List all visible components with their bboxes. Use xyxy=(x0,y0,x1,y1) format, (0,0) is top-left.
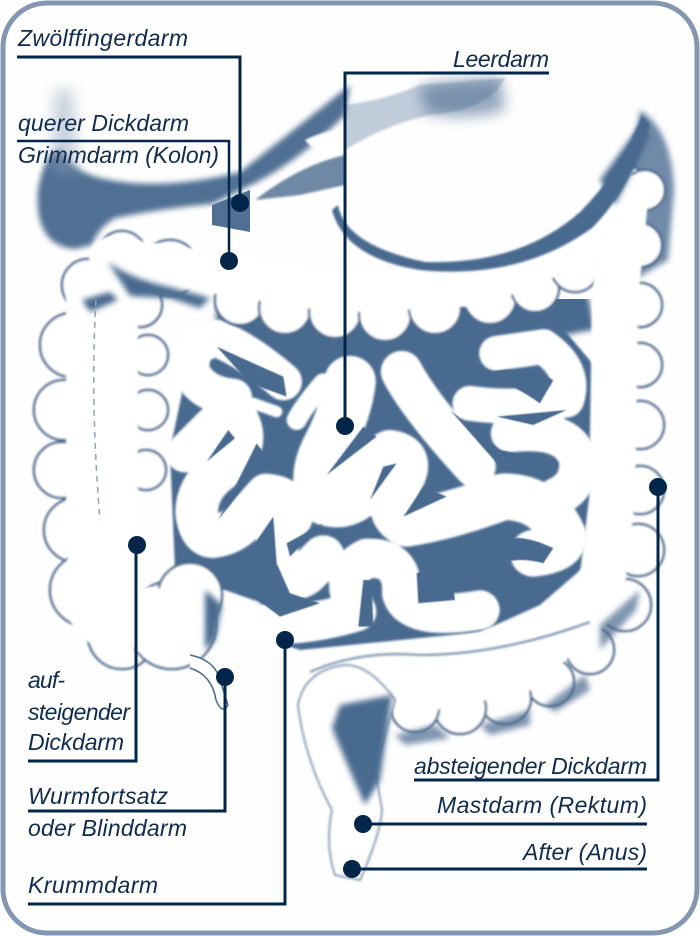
loop: hook xyxy=(363,453,563,553)
transverse colon shadow band xyxy=(215,305,590,333)
label: After (Anus): After (Anus) xyxy=(521,839,647,865)
descending colon scallops xyxy=(599,170,665,631)
label: aufsteigender Dickdarm: Dickdarm xyxy=(28,729,124,755)
stomach top shading xyxy=(420,78,505,117)
loop: right lobe xyxy=(510,432,578,497)
label: aufsteigender Dickdarm: steigender xyxy=(28,699,131,725)
label: Mastdarm (Rektum): Mastdarm (Rektum) xyxy=(437,792,647,818)
label: aufsteigender Dickdarm xyxy=(28,667,131,755)
small intestine loops xyxy=(185,338,578,624)
leader: aufsteigender Dickdarm xyxy=(28,545,136,761)
label: Leerdarm: Leerdarm xyxy=(453,46,549,72)
marker dots xyxy=(128,194,667,878)
loop: upper right xyxy=(470,347,569,406)
loop: central xyxy=(319,382,367,501)
small intestine folds xyxy=(207,347,567,627)
loop: diagonal xyxy=(402,372,475,467)
leader: Mastdarm xyxy=(363,822,647,826)
leader: absteigender Dickdarm xyxy=(414,487,658,780)
label: aufsteigender Dickdarm: auf- xyxy=(28,667,65,693)
label: absteigender Dickdarm: absteigender Dickdarm xyxy=(414,753,647,779)
white patches around loops xyxy=(150,570,610,680)
ascending colon texture xyxy=(94,300,100,520)
colon scallops xyxy=(34,167,665,734)
colon fill xyxy=(102,195,625,690)
transverse colon scallops xyxy=(98,167,648,341)
leader: After xyxy=(352,868,647,870)
duodenum shadow xyxy=(212,190,250,232)
loop: upper left xyxy=(191,338,283,397)
ascending colon scallops xyxy=(34,259,222,669)
colon folds xyxy=(82,125,650,745)
sigmoid colon scallops xyxy=(391,626,614,734)
label: Grimmdarm (Kolon): Grimmdarm (Kolon) xyxy=(18,142,219,168)
illustration: digestive tract xyxy=(34,78,674,880)
rectum xyxy=(298,665,395,880)
loop: left S xyxy=(185,425,213,453)
sigmoid upper edge xyxy=(310,622,590,672)
label: Zwölffingerdarm: Zwölffingerdarm xyxy=(17,25,188,51)
leader: querer Dickdarm xyxy=(17,141,229,261)
right colon shadow xyxy=(590,110,674,300)
label: Wurmfortsatz: Wurmfortsatz xyxy=(28,783,168,809)
label: Krummdarm: Krummdarm xyxy=(28,872,158,898)
leader: Leerdarm xyxy=(345,73,549,426)
leader: Wurmfortsatz xyxy=(28,677,225,811)
leader: Zwölffingerdarm xyxy=(17,57,240,203)
stomach wall xyxy=(332,115,650,272)
liver fade xyxy=(52,90,78,175)
label: querer Dickdarm: querer Dickdarm xyxy=(18,110,189,136)
stomach top xyxy=(255,78,505,200)
liver shadow xyxy=(38,85,350,249)
leader: Krummdarm xyxy=(28,640,285,904)
small intestine dark mass xyxy=(170,325,598,650)
loop: lower arch xyxy=(227,558,480,624)
appendix xyxy=(190,655,228,709)
label: oder Blinddarm: oder Blinddarm xyxy=(28,815,187,841)
